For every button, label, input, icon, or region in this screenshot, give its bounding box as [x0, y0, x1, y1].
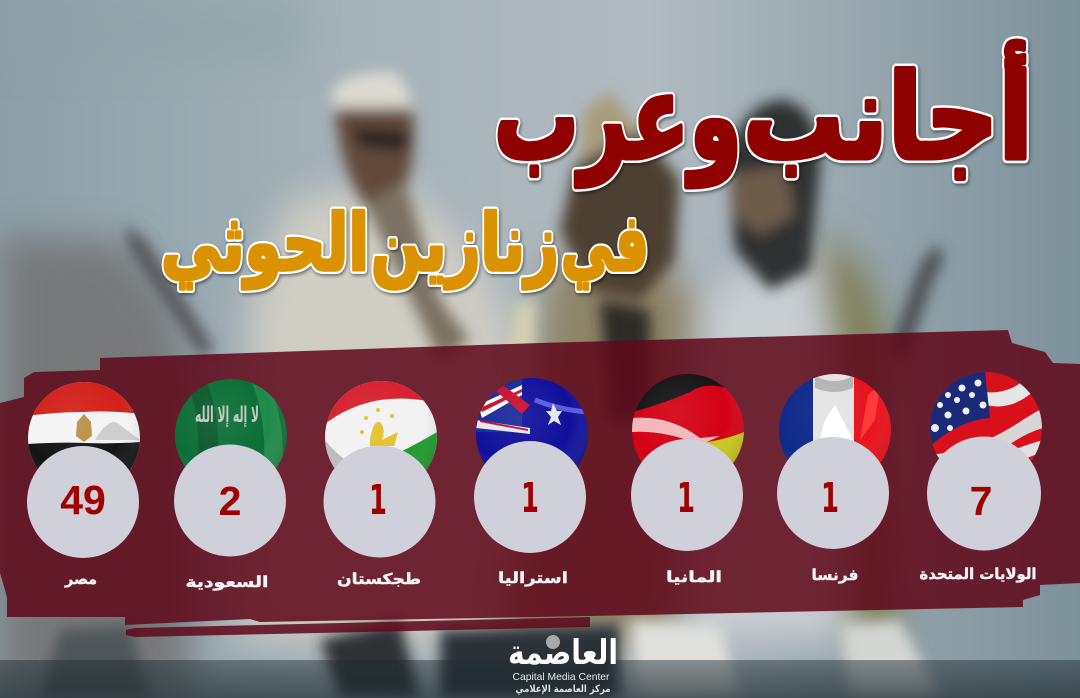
flag: United States — [930, 372, 1042, 462]
stat: United States 7: 7 — [970, 478, 992, 524]
stat: Egypt 49: 49 — [60, 477, 106, 523]
label: Saudi Arabia: السعودية — [186, 573, 268, 591]
flag: Saudi Arabia — [175, 379, 287, 468]
flag: Australia — [476, 378, 588, 467]
stat: Tajikistan 1 — [324, 446, 436, 558]
logo: Capital Media Center: Capital Media Center — [512, 671, 610, 683]
subtitle: in Houthi cells: الحوثي — [161, 199, 369, 289]
flag: Saudi Arabia: لا إله إلا الله — [195, 403, 259, 428]
flag: Tajikistan — [325, 381, 437, 470]
title: foreigners and Arabs: وعرب — [494, 48, 742, 187]
logo: Capital Media Center: العاصمة — [508, 633, 618, 673]
stat: Tajikistan 1: 1 — [369, 476, 387, 524]
stat: Germany 1: 1 — [677, 474, 695, 522]
logo: Capital Media Center: مركز العاصمة الإعلامي — [516, 684, 610, 695]
flag: Egypt — [28, 382, 140, 470]
stat: Saudi Arabia 2 — [174, 444, 286, 556]
stat: Australia 1 — [474, 441, 586, 553]
title: foreigners and Arabs: وعرب — [494, 48, 742, 187]
subtitle: in Houthi cells — [161, 199, 649, 289]
label: Germany: المانيا — [666, 568, 722, 586]
flag: France — [779, 374, 891, 463]
title: foreigners and Arabs: أجانب — [743, 40, 1033, 186]
title: foreigners and Arabs: أجانب — [743, 40, 1033, 186]
subtitle: in Houthi cells: زنازين — [371, 199, 559, 289]
label: United States: الولايات المتحدة — [920, 565, 1036, 583]
subtitle: in Houthi cells: في — [561, 199, 649, 289]
stat: Egypt 49 — [27, 446, 139, 558]
banner: red brush stroke — [0, 330, 1080, 637]
stat: Saudi Arabia 2: 2 — [219, 478, 241, 524]
stat: Germany 1 — [631, 439, 743, 551]
stat: Australia 1: 1 — [521, 474, 539, 522]
stat: United States 7 — [927, 436, 1041, 550]
subtitle: in Houthi cells: زنازين — [371, 199, 559, 289]
stat: France 1: 1 — [821, 474, 839, 522]
subtitle: in Houthi cells: في — [561, 199, 649, 289]
logo: Capital Media Center — [508, 633, 618, 695]
label: Australia: استراليا — [498, 569, 568, 587]
subtitle: in Houthi cells: الحوثي — [161, 199, 369, 289]
label: Tajikistan: طجكستان — [337, 570, 421, 588]
stat: France 1 — [777, 437, 889, 549]
title: foreigners and Arabs — [494, 40, 1033, 187]
flag: Germany — [632, 374, 744, 464]
label: Egypt: مصر — [64, 570, 97, 588]
label: France: فرنسا — [812, 566, 858, 584]
